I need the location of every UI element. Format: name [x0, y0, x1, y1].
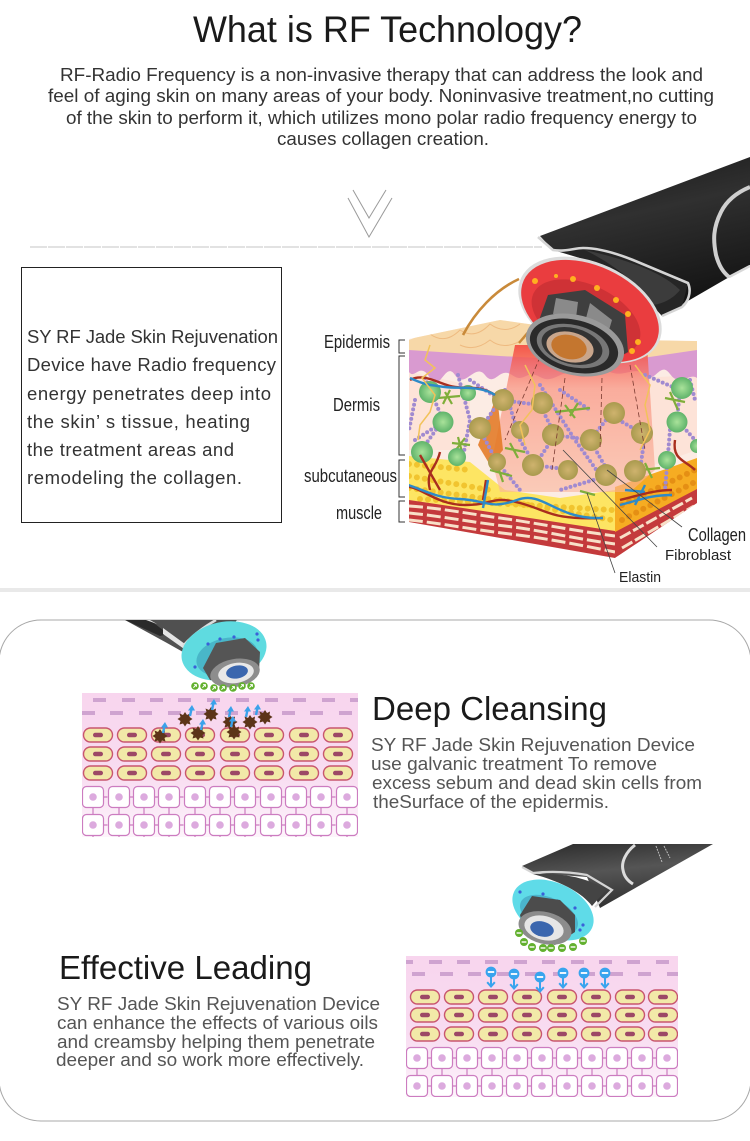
fat layer right side [615, 458, 697, 533]
dermis tint [409, 372, 697, 470]
dashed divider [30, 246, 542, 248]
section divider band [0, 588, 750, 592]
text: deep cleansing description [371, 734, 702, 812]
text: effective leading description: and creamsby helping them penetrate [57, 1031, 375, 1052]
intro paragraph: feel of aging skin on many areas of your body. Noninvasive treatment,no cutting [48, 85, 714, 106]
device printed text marks [656, 846, 670, 862]
muscle layer [409, 500, 615, 560]
lens rings [519, 304, 631, 386]
tan fibre balls [469, 389, 653, 486]
text box: device description: the treatment areas and [27, 439, 234, 460]
collagen and elastin chains [409, 375, 695, 490]
text: effective leading description: deeper and so work more effectively. [56, 1049, 364, 1070]
negative ions row [515, 929, 587, 952]
text box: device description: remodeling the collagen. [27, 467, 242, 488]
text box: device description [22, 268, 282, 522]
green fibre balls [411, 377, 704, 469]
epidermis top surface [409, 320, 697, 362]
text: deep cleansing description: excess sebum and dead skin cells from [372, 772, 702, 793]
text box: device description: SY RF Jade Skin Rejuvenation [27, 326, 278, 347]
barrel [532, 290, 628, 372]
layer labels [304, 332, 746, 545]
skin cross-section diagram: Fibroblast [665, 548, 731, 564]
panel: treatments [0, 620, 750, 1121]
layer labels: Epidermis [324, 332, 390, 352]
upward arrows [161, 699, 261, 733]
positive ions row [191, 682, 255, 692]
dashed radio-frequency lines [505, 357, 645, 470]
text: deep cleansing description: theSurface of the epidermis. [373, 791, 609, 812]
hair strands [463, 279, 519, 335]
device with blue light, deep cleansing [125, 620, 266, 688]
purple basal layer [409, 347, 697, 383]
text: deep cleansing description: use galvanic treatment To remove [371, 753, 657, 774]
text: effective leading description: SY RF Jade Skin Rejuvenation Device [57, 993, 380, 1014]
layer labels: muscle [336, 503, 382, 523]
text box: device description: energy penetrates deep into [27, 383, 271, 404]
text: effective leading description [56, 993, 380, 1070]
red energy beam [492, 345, 655, 492]
negative ions with downward arrows [486, 967, 610, 992]
deep cleansing skin diagram [70, 693, 363, 842]
layer labels: Dermis [333, 395, 380, 415]
blood vessels [405, 377, 695, 518]
layer brackets [399, 340, 405, 522]
RF device with red light [501, 157, 750, 386]
skin cross-section diagram: Elastin [619, 570, 661, 586]
heading: effective leading: Effective Leading [59, 949, 312, 986]
effective leading skin diagram [400, 956, 682, 1104]
intro paragraph: RF-Radio Frequency is a non-invasive therapy that can address the look and [60, 64, 703, 85]
fibroblast cells [438, 390, 685, 495]
intro paragraph: causes collagen creation. [277, 128, 489, 149]
text: deep cleansing description: SY RF Jade Skin Rejuvenation Device [371, 734, 695, 755]
heading: deep cleansing: Deep Cleansing [372, 690, 607, 727]
text box: device description: Device have Radio frequency [27, 354, 277, 375]
intro paragraph [48, 64, 714, 149]
fat cell texture [409, 464, 612, 520]
text box: device description: the skin’ s tissue, heating [27, 411, 250, 432]
title: What is RF Technology? [193, 9, 582, 50]
LED dots [532, 274, 641, 354]
leader lines [563, 450, 682, 573]
intro paragraph: of the skin to perform it, which utilizes mono polar radio frequency energy to [66, 107, 697, 128]
dirt particles [152, 707, 272, 744]
nerve fibres [418, 345, 650, 450]
icon: double chevron [348, 190, 392, 237]
device with blue light, effective leading [512, 844, 713, 945]
fat layer [409, 456, 615, 535]
skin cross-section diagram [304, 279, 746, 586]
layer labels: subcutaneous [304, 466, 397, 486]
text: effective leading description: can enhance the effects of various oils [57, 1012, 378, 1033]
